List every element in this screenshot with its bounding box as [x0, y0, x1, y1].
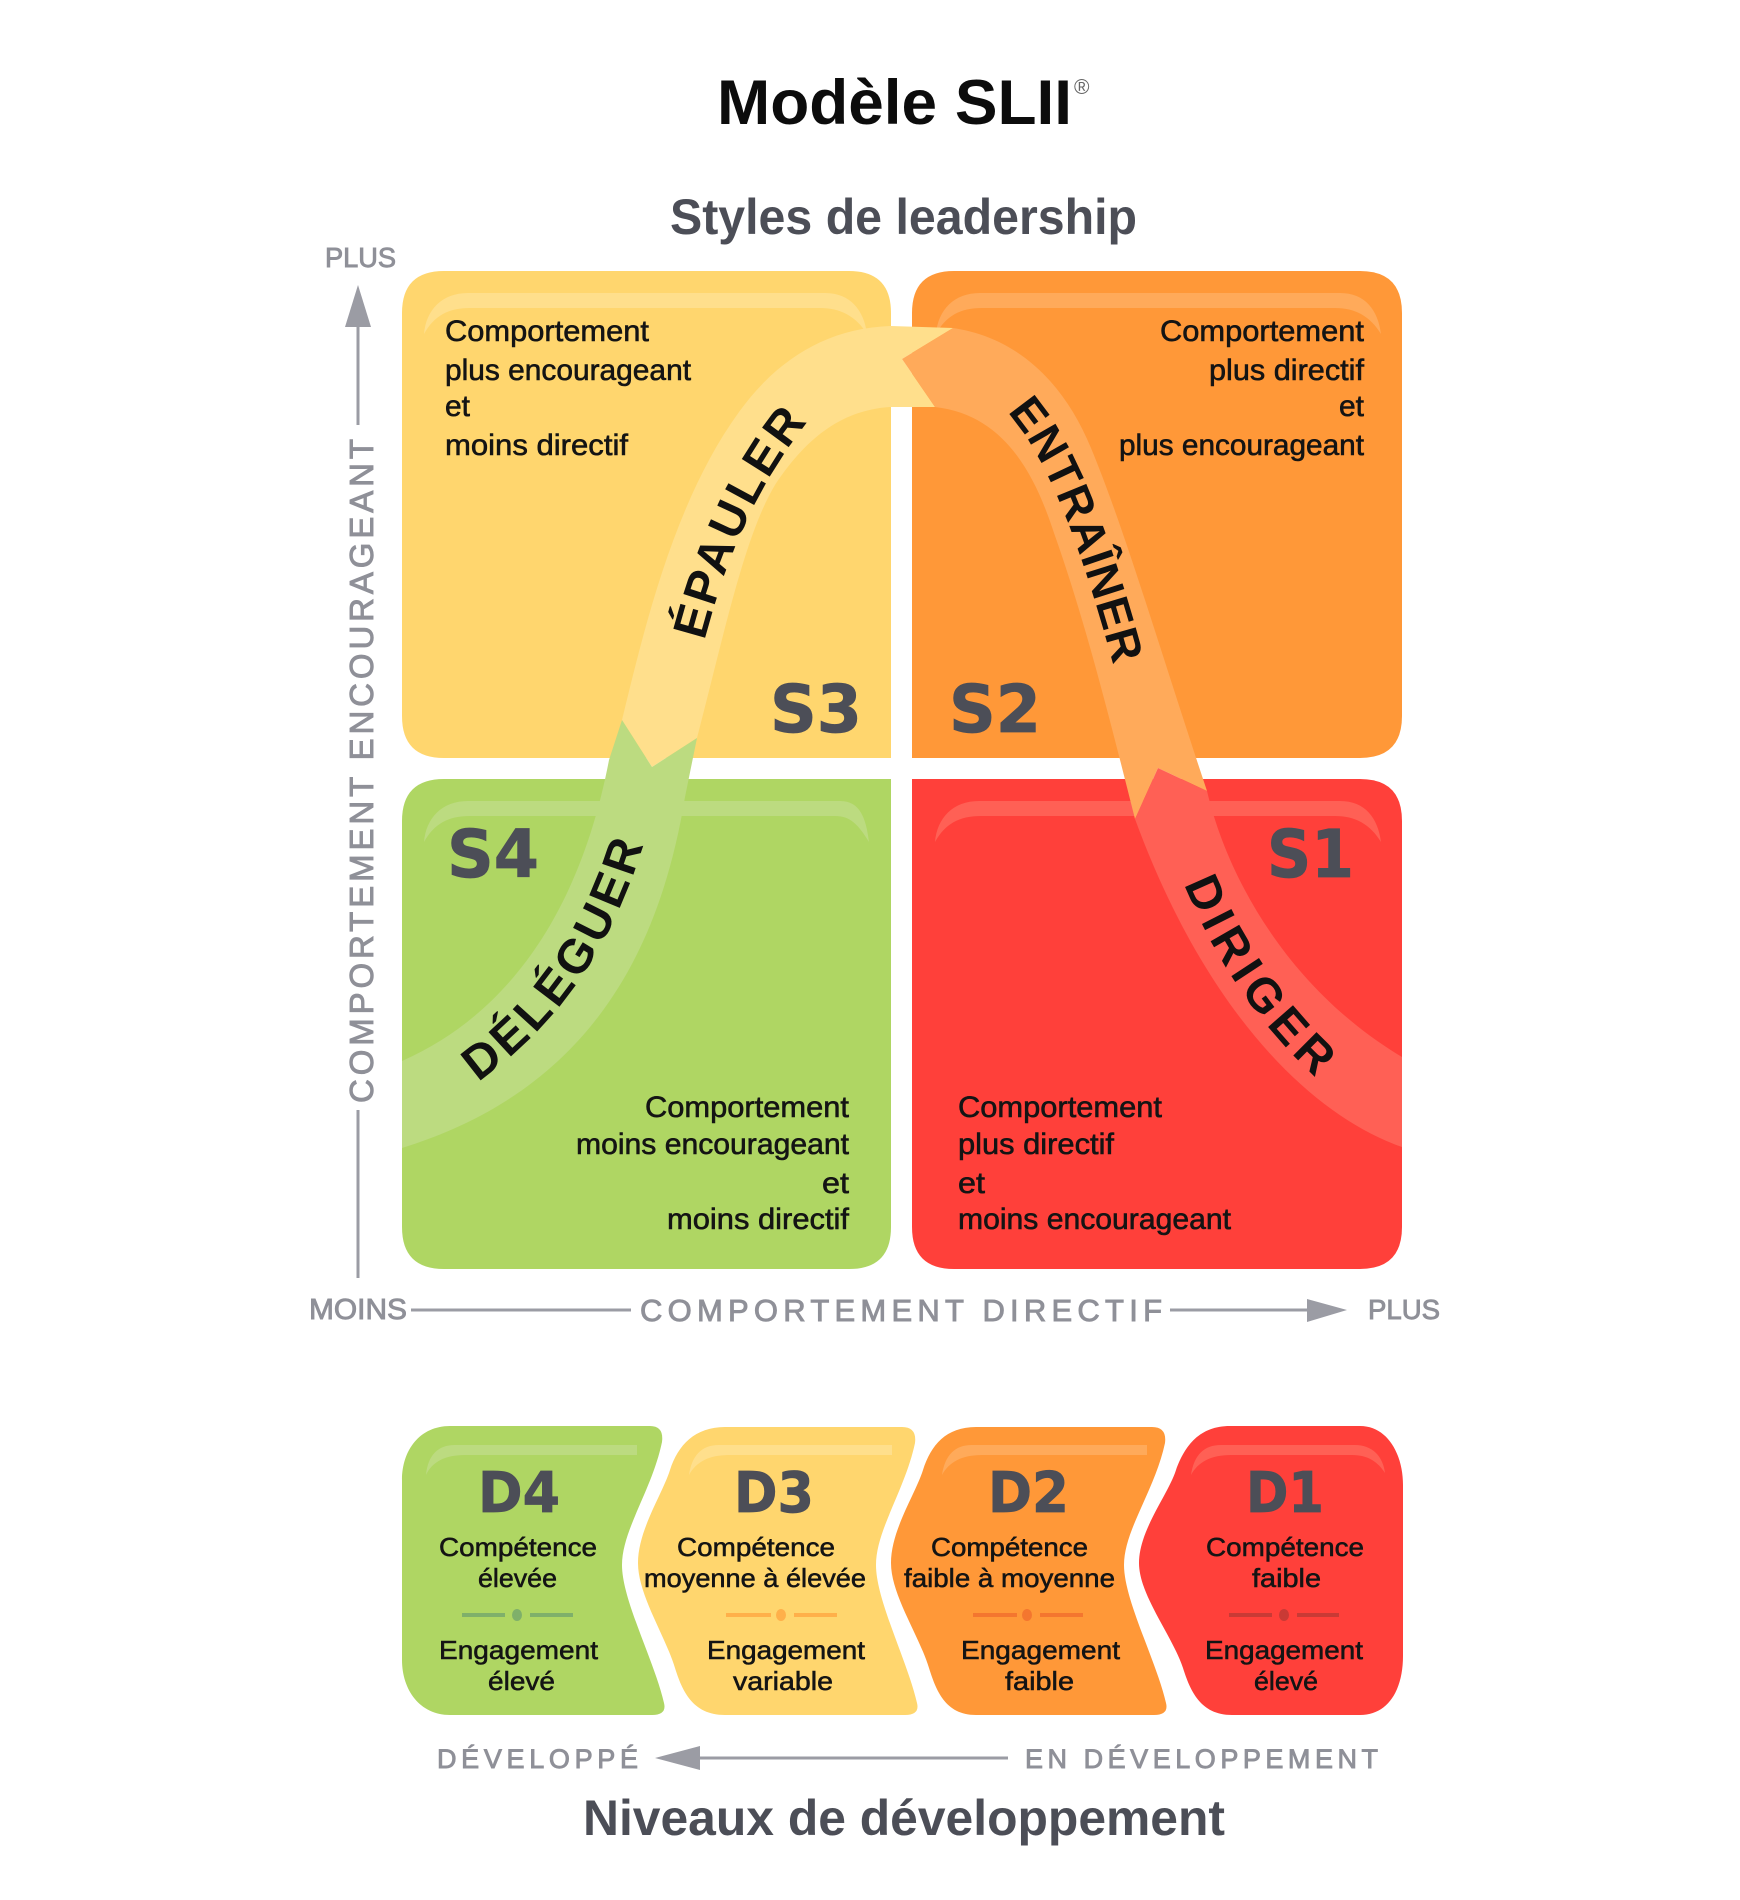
panel: S1: et	[958, 1167, 986, 1200]
arrow ribbon: déléguer	[402, 720, 697, 1148]
vertical axis: comportement encourageant	[325, 242, 396, 1278]
tile: D3: Compétence	[677, 1532, 835, 1562]
horizontal axis: comportement directif	[309, 1293, 1440, 1328]
tile: D2: Engagement	[961, 1635, 1121, 1665]
arrow ribbon: déléguer: DÉLÉGUER	[460, 839, 644, 1080]
tile: D1	[1139, 1426, 1403, 1715]
panel: S3: plus encourageant	[445, 354, 692, 387]
panel: S2	[912, 271, 1402, 758]
tile: D4: élevé	[488, 1666, 555, 1696]
tile: D2: Compétence	[931, 1532, 1088, 1562]
heading: niveaux de développement: Niveaux de développement	[583, 1790, 1225, 1846]
vertical axis: comportement encourageant: COMPORTEMENT ENCOURAGEANT	[343, 439, 380, 1103]
tile: D4	[402, 1426, 664, 1715]
tile: D1: D1	[1246, 1461, 1324, 1526]
horizontal axis: comportement directif: PLUS	[1368, 1294, 1440, 1325]
panel: S1: S1	[1267, 816, 1354, 893]
tile: D2: faible à moyenne	[904, 1563, 1115, 1593]
panel: S1: moins encourageant	[958, 1203, 1232, 1236]
arrow ribbon: épauler	[622, 326, 952, 767]
tile: D1: faible	[1252, 1563, 1321, 1593]
panel: S1: Comportement	[958, 1091, 1163, 1124]
panel: S1	[912, 779, 1402, 1269]
vertical axis: comportement encourageant: PLUS	[325, 242, 396, 273]
tile: D2: faible	[1005, 1666, 1074, 1696]
arrow ribbon: épauler: ÉPAULER	[668, 408, 807, 638]
tile: D1: Engagement	[1205, 1635, 1364, 1665]
panel: S4: Comportement	[645, 1091, 850, 1124]
title: ®	[1074, 76, 1090, 99]
tile: D3: moyenne à élevée	[644, 1563, 866, 1593]
tile: D4: Engagement	[439, 1635, 599, 1665]
tile: D4: Compétence	[439, 1532, 597, 1562]
panel: S4: moins encourageant	[576, 1128, 850, 1161]
panel: S2: plus directif	[1209, 354, 1365, 387]
horizontal axis: comportement directif: MOINS	[309, 1294, 407, 1326]
tile: D4: D4	[478, 1461, 560, 1526]
tile: D2	[891, 1427, 1166, 1715]
development axis arrow: EN DÉVELOPPEMENT	[1025, 1744, 1378, 1774]
horizontal axis: comportement directif: COMPORTEMENT DIRECTIF	[640, 1293, 1162, 1328]
tile: D3	[638, 1427, 918, 1715]
panel: S3: moins directif	[445, 429, 629, 462]
panel: S2: Comportement	[1160, 315, 1365, 348]
panel: S4: moins directif	[667, 1203, 850, 1236]
arrow ribbon: diriger: DIRIGER	[1185, 874, 1333, 1077]
arrow ribbon: entraîner: ENTRAÎNER	[1009, 394, 1141, 664]
panel: S3: et	[445, 390, 471, 423]
panel: S3: Comportement	[445, 315, 650, 348]
tile: D3: Engagement	[707, 1635, 866, 1665]
arrow ribbon: diriger	[1135, 768, 1402, 1147]
tile: D2: D2	[988, 1461, 1069, 1526]
tile: D1: Compétence	[1206, 1532, 1364, 1562]
tile: D3: variable	[733, 1666, 833, 1696]
panel: S4: S4	[447, 816, 539, 893]
development axis arrow: DÉVELOPPÉ	[437, 1744, 638, 1774]
title: Modèle SLII	[717, 68, 1072, 138]
panel: S3	[402, 271, 891, 758]
tile: D1: élevé	[1254, 1666, 1318, 1696]
development axis arrow	[437, 1744, 1378, 1774]
panel: S1: plus directif	[958, 1128, 1115, 1161]
panel: S2: S2	[949, 671, 1041, 748]
panel: S4: et	[822, 1167, 850, 1200]
tile: D3: D3	[734, 1461, 814, 1526]
panel: S4	[402, 779, 891, 1269]
panel: S3: S3	[770, 671, 862, 748]
panel: S2: plus encourageant	[1119, 429, 1365, 462]
arrow ribbon: entraîner	[902, 328, 1207, 819]
panel: S2: et	[1339, 390, 1365, 423]
tile: D4: élevée	[478, 1563, 557, 1593]
heading: styles de leadership: Styles de leadership	[670, 189, 1137, 245]
